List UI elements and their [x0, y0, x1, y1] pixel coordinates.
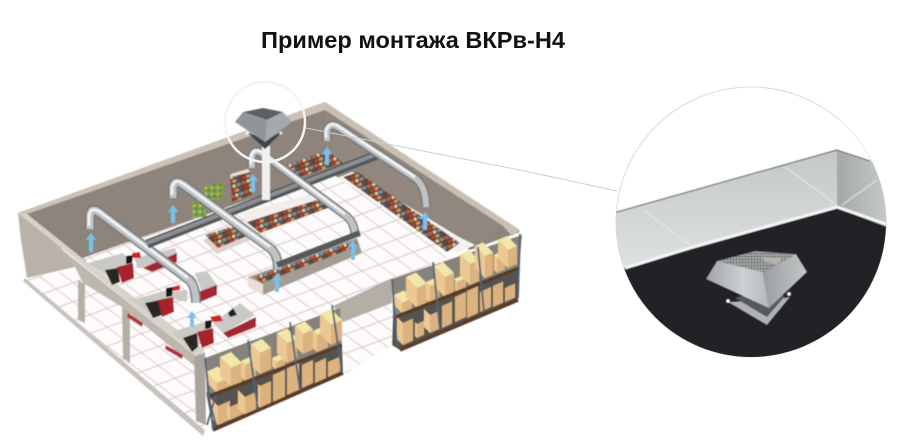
rack posts [205, 234, 520, 430]
corner column [194, 352, 206, 425]
duct D [326, 124, 426, 207]
central gondola [240, 195, 330, 236]
wall rim right [325, 102, 520, 236]
checkout 2 [132, 271, 217, 318]
connector line [306, 128, 617, 191]
upper floor [83, 172, 475, 357]
main duct [147, 154, 377, 244]
parapet side face [837, 150, 890, 228]
front beam top edge [18, 213, 205, 357]
parapet flashing [625, 207, 886, 268]
checkout 1 [88, 248, 177, 285]
wall rim left [18, 102, 325, 214]
dark roof surface [624, 208, 886, 357]
left rack frame [205, 308, 343, 430]
duct C [251, 151, 355, 237]
magnified circle outline [616, 87, 886, 357]
parapet front face [610, 150, 837, 272]
right wall shelf [337, 172, 472, 253]
air flow arrows [86, 147, 430, 327]
duct A [89, 210, 196, 303]
left rack boxes [206, 309, 342, 425]
checkout 3 [171, 303, 256, 352]
duct B [172, 181, 278, 269]
parapet top edge [610, 150, 870, 214]
magnified roof view [610, 87, 890, 360]
beam between racks [333, 278, 392, 322]
front gondola [248, 238, 362, 295]
red under-counters [127, 313, 143, 327]
right rack frame [392, 235, 522, 350]
lower floor [25, 268, 205, 432]
front duct [277, 233, 360, 265]
title: Пример монтажа ВКРв-Н4 [261, 27, 565, 53]
vertical riser [262, 146, 270, 200]
store cutaway illustration [18, 82, 890, 436]
rack shelves [207, 268, 519, 430]
white sky cap [837, 120, 870, 161]
left end wall [18, 213, 75, 278]
left gondola [203, 227, 250, 254]
wall corner shade [325, 110, 503, 248]
outer walls [18, 102, 520, 262]
column 2 [122, 307, 130, 363]
back wall shelves [192, 202, 207, 218]
opening floor [340, 298, 392, 374]
column 1 [78, 280, 85, 323]
callout circle with fan [225, 82, 305, 162]
outer floor edge [23, 278, 205, 436]
right rack boxes [394, 236, 517, 345]
roof fan [706, 251, 807, 325]
parapet seams [643, 167, 877, 245]
front beam face [50, 240, 197, 368]
